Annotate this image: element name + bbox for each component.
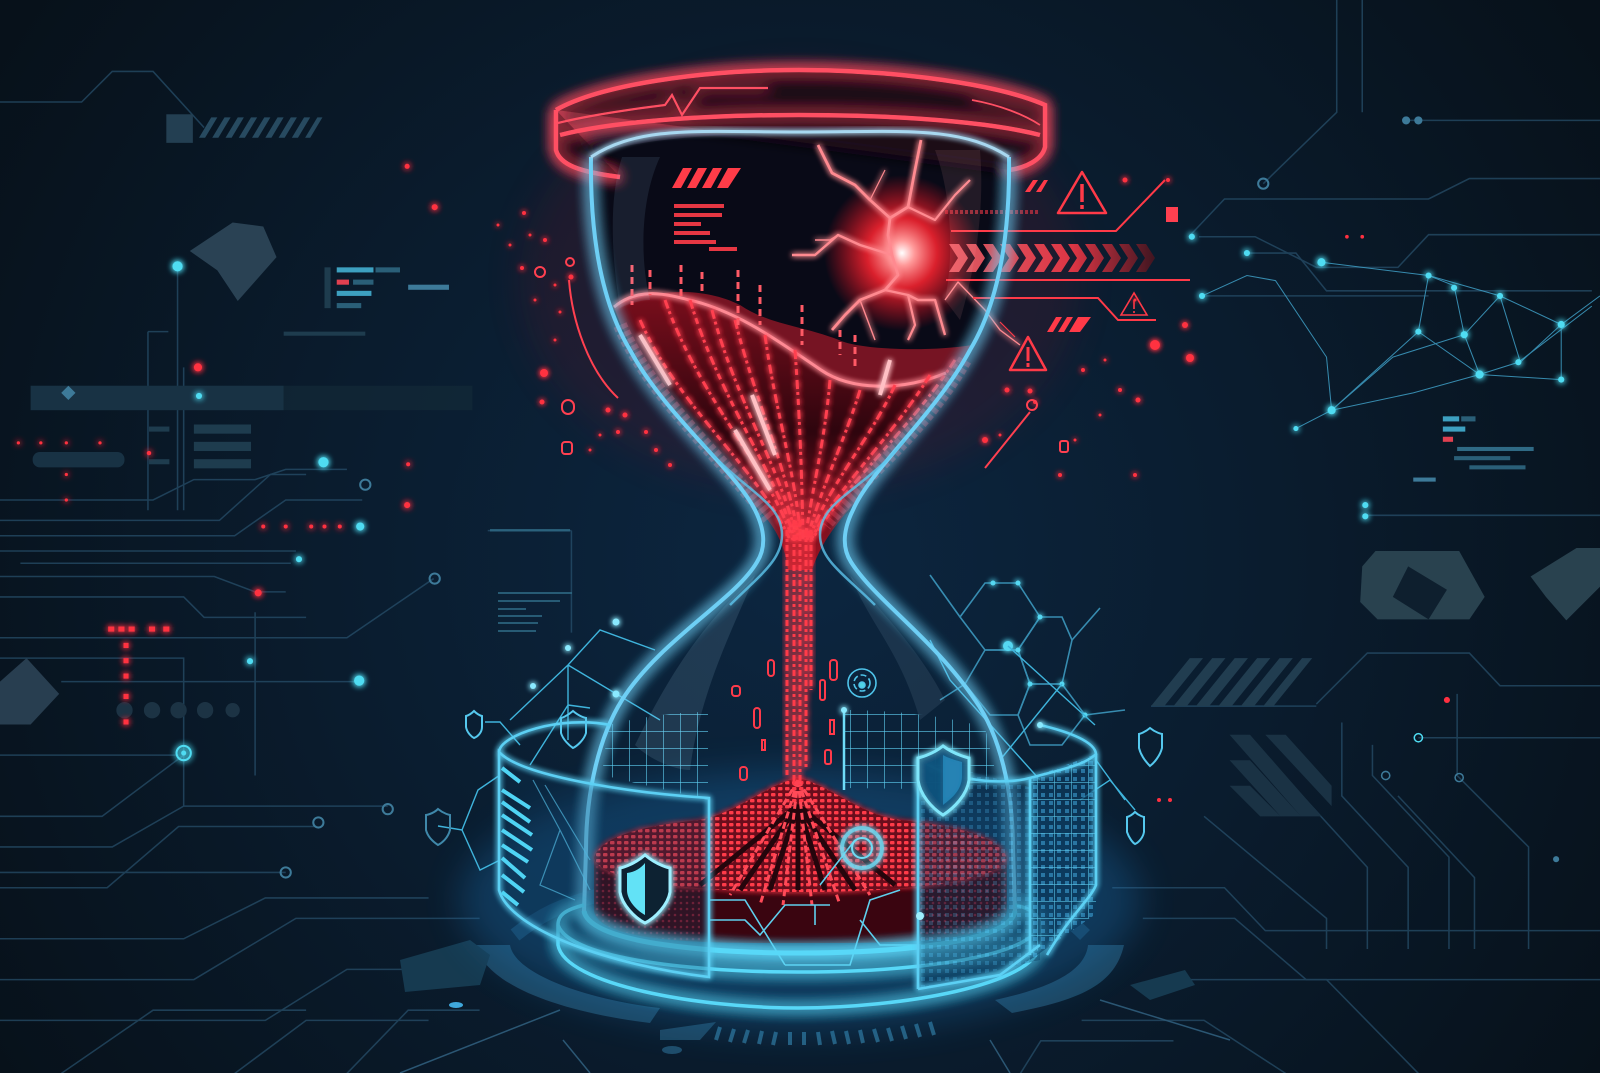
crack impact bbox=[792, 140, 1020, 345]
stray readout text bars bbox=[490, 529, 572, 632]
data glyph columns above sand bbox=[632, 265, 855, 370]
holographic ring wrap bbox=[499, 722, 1096, 989]
glass highlights bbox=[613, 157, 660, 308]
holographic back grid panels bbox=[602, 710, 1000, 800]
icon: warning triangle large bbox=[1058, 172, 1106, 213]
icon: warning triangle lower bbox=[1010, 337, 1046, 370]
icon: grey hexagon cube left bbox=[190, 222, 277, 301]
icon: grey hex cubes right bbox=[1360, 548, 1600, 620]
floor rings below the base bbox=[400, 895, 1230, 1073]
icon: warning triangle small bbox=[1121, 293, 1147, 315]
falling sand stream bbox=[787, 520, 811, 785]
glass: hourglass silhouette bbox=[584, 131, 1015, 953]
circuit lines: right bbox=[1020, 0, 1600, 1073]
glass: upper bulb interior bbox=[591, 133, 1009, 540]
icon: small outline shields bbox=[426, 711, 1162, 845]
top ring cap bbox=[556, 70, 1045, 177]
upper sand body bbox=[614, 265, 972, 570]
falling red data bits bbox=[732, 660, 837, 780]
network graph: constellation right bbox=[1202, 262, 1600, 429]
readout bars in glass bbox=[674, 204, 737, 251]
sand: lower bulb cylinder and pile bbox=[594, 778, 1007, 943]
small network lines around holo ring bbox=[438, 630, 1135, 870]
icon: grey cube lower left bbox=[0, 658, 59, 724]
warning chevrons bbox=[949, 244, 1155, 272]
panel: left circuit background bbox=[0, 71, 571, 1073]
icon: large shield right bbox=[918, 746, 969, 815]
sand surface wave bbox=[614, 292, 972, 386]
icon: target ring in lower bulb bbox=[848, 669, 876, 697]
red particles around upper bulb bbox=[496, 178, 1194, 477]
network nodes bbox=[1189, 234, 1565, 519]
data streams funnelling into neck bbox=[640, 300, 955, 540]
dim nodes left bbox=[281, 480, 440, 878]
sand pile data streaks bbox=[700, 805, 895, 890]
bright streaks bbox=[640, 335, 890, 490]
panel: glass readouts bbox=[672, 168, 741, 251]
circuit lines: left bbox=[0, 71, 571, 1073]
connector node bbox=[916, 912, 924, 920]
accent nodes right bbox=[1258, 116, 1559, 862]
hatch block: right lower bbox=[1230, 735, 1332, 816]
panel: small readout right bbox=[1413, 416, 1534, 482]
icon: large shield left bbox=[620, 855, 670, 923]
glass outline bbox=[584, 157, 1015, 953]
hatch mark in glass bbox=[672, 168, 741, 188]
hologram circuit traces on sand bbox=[708, 840, 920, 965]
block: hatch tag bbox=[166, 114, 322, 143]
panel: right circuit background bbox=[1020, 0, 1600, 1073]
row of dim circles bbox=[116, 702, 240, 718]
red open rings and arcs bbox=[535, 208, 1177, 468]
panel: small readout left bbox=[324, 267, 449, 308]
glass rim bbox=[591, 131, 1009, 157]
crack lines bbox=[792, 140, 1020, 345]
hatch marks right bbox=[1025, 180, 1091, 332]
hatch block: right upper bbox=[1151, 658, 1312, 706]
red dots lower right bbox=[1157, 798, 1172, 802]
icon: target ring on sand bbox=[842, 828, 882, 868]
left panel stripes bbox=[502, 768, 532, 905]
hexagon lattice bbox=[930, 575, 1125, 760]
panel: data bars left bbox=[31, 332, 472, 468]
red glowing nodes left bbox=[17, 164, 438, 724]
left holo panel bbox=[499, 752, 709, 977]
cyan glowing nodes left bbox=[172, 261, 364, 760]
base platform bbox=[558, 905, 1040, 1008]
glow: blue aura around the lower base bbox=[460, 770, 1140, 1030]
pink haze along glass bbox=[620, 325, 965, 525]
cyan glowing nodes around ring bbox=[530, 618, 1043, 728]
inner neck lines bbox=[700, 440, 905, 605]
red connector lines right bbox=[945, 180, 1190, 337]
glow: red aura around the upper bulb bbox=[520, 70, 1080, 490]
right holo panel: dotted fill bbox=[918, 758, 1040, 989]
